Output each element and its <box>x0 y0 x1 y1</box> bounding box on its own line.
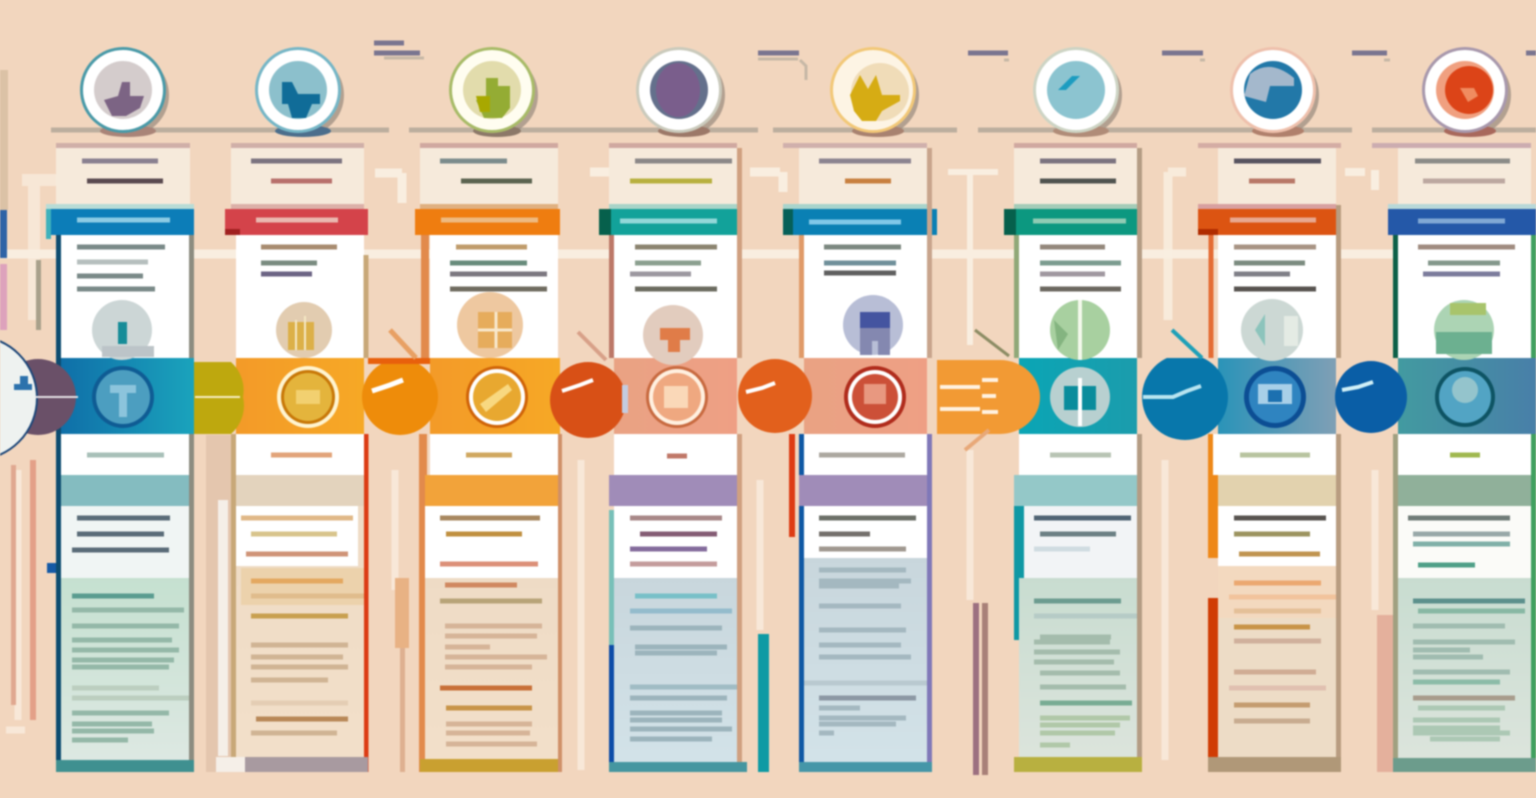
icon: mid circle 8 <box>1434 300 1494 360</box>
column 6: side borders <box>1014 235 1019 358</box>
icon: mid circle 7 <box>1241 299 1303 361</box>
column 8: lower content <box>1393 434 1536 772</box>
icon: mid circle 4 <box>643 305 703 365</box>
icon: band circle 1 <box>92 366 154 428</box>
column 3: lower content <box>420 434 558 772</box>
column 6: white text panel <box>1019 235 1137 359</box>
icon: circle 8 <box>1422 47 1511 137</box>
icon: mid circle 1 <box>92 300 154 360</box>
column 6: green header bar <box>1004 204 1142 235</box>
band connector: olive node <box>194 362 244 434</box>
icon: band circle 8 <box>1435 367 1495 427</box>
band connector: orange node <box>362 358 438 435</box>
mid-panel round icons <box>92 292 1494 365</box>
column 3: top title card <box>420 143 558 205</box>
top divider line <box>51 128 1536 132</box>
icon: mid circle 5 <box>843 295 903 355</box>
icon: band circle 7 <box>1244 366 1306 428</box>
column 4: top title card <box>609 143 737 205</box>
column 3: orange header bar <box>415 204 560 235</box>
column 1 <box>46 143 194 772</box>
pale connectors between columns <box>0 170 1536 770</box>
column 4: lower content <box>609 434 747 772</box>
column 2: lower content <box>216 434 368 772</box>
column 6 <box>1004 143 1142 772</box>
top circular icons <box>80 47 1511 137</box>
column 8: blue header bar <box>1388 204 1536 235</box>
column 8: top title card <box>1372 143 1531 205</box>
column 2 <box>216 143 368 772</box>
column 5: side borders <box>799 235 804 358</box>
band connector: orange-red node <box>738 359 812 433</box>
column 8: white text panel <box>1398 235 1531 359</box>
band connector: red-orange node <box>550 362 626 438</box>
column 5: blue header bar <box>783 204 937 235</box>
column 1: lower content <box>56 434 194 772</box>
column 2: white text panel <box>236 235 364 359</box>
column 4: white text panel <box>614 235 737 359</box>
diagonal connector ticks at the band <box>390 330 1202 450</box>
column 8 <box>1372 143 1536 772</box>
column 8: side borders <box>1393 235 1398 358</box>
icon: band circle 3 <box>466 366 528 428</box>
column 1: blue header bar <box>46 204 194 239</box>
icon: mid circle 2 <box>276 302 332 358</box>
column 5: white text panel <box>804 235 927 359</box>
column 4 <box>599 143 747 772</box>
column 7: top title card <box>1198 143 1341 205</box>
column 1: white text panel <box>61 235 189 359</box>
left start node <box>0 336 78 460</box>
icon: circle 2 <box>255 47 344 137</box>
icon: band circle 4 <box>646 366 708 428</box>
column 3: side borders <box>423 235 425 772</box>
column 3: white text panel <box>430 235 558 359</box>
icon: circle 4 <box>636 47 725 137</box>
icon: band circle 6 <box>1050 367 1110 427</box>
column 4: teal header bar <box>599 204 742 235</box>
column 6: top title card <box>1014 143 1137 205</box>
column 7: side borders <box>1208 235 1214 358</box>
icon: band circle 5 <box>844 366 906 428</box>
column 7: white text panel <box>1218 235 1336 359</box>
band connector: blue node <box>1142 354 1228 440</box>
icon: band circle 2 <box>277 366 339 428</box>
column 5 <box>783 143 937 772</box>
decorative vertical accent bars <box>206 434 1393 775</box>
column 5: top title card <box>783 143 927 205</box>
icon: mid circle 3 <box>457 292 523 358</box>
icon: circle 5 <box>830 47 919 137</box>
column 1: top title card <box>56 143 190 205</box>
column 3 <box>415 143 560 772</box>
column 2: top title card <box>231 143 364 205</box>
column 7: lower content <box>1208 434 1341 772</box>
icon: circle 3 <box>449 47 538 137</box>
band connector: dark blue node <box>1335 361 1407 433</box>
small floating labels above the divider <box>374 43 1536 80</box>
icon: circle 6 <box>1033 47 1122 137</box>
central horizontal band <box>61 358 1536 434</box>
side strips at far left <box>0 70 56 720</box>
icon: circle 1 <box>80 47 169 137</box>
column 1: side borders <box>56 235 61 772</box>
band round icons <box>92 366 1495 428</box>
icon: circle 7 <box>1230 47 1319 137</box>
column 6: lower content <box>1014 434 1142 772</box>
column 5: lower content <box>799 434 932 772</box>
column 2: red header bar <box>225 204 368 235</box>
column 4: side borders <box>609 235 614 358</box>
column 7: orange-red header bar <box>1198 204 1341 235</box>
column 7 <box>1198 143 1341 772</box>
column 2: side borders <box>234 255 366 772</box>
icon: mid circle 6 <box>1050 300 1110 360</box>
band connector: orange arrow segment <box>937 360 1040 434</box>
